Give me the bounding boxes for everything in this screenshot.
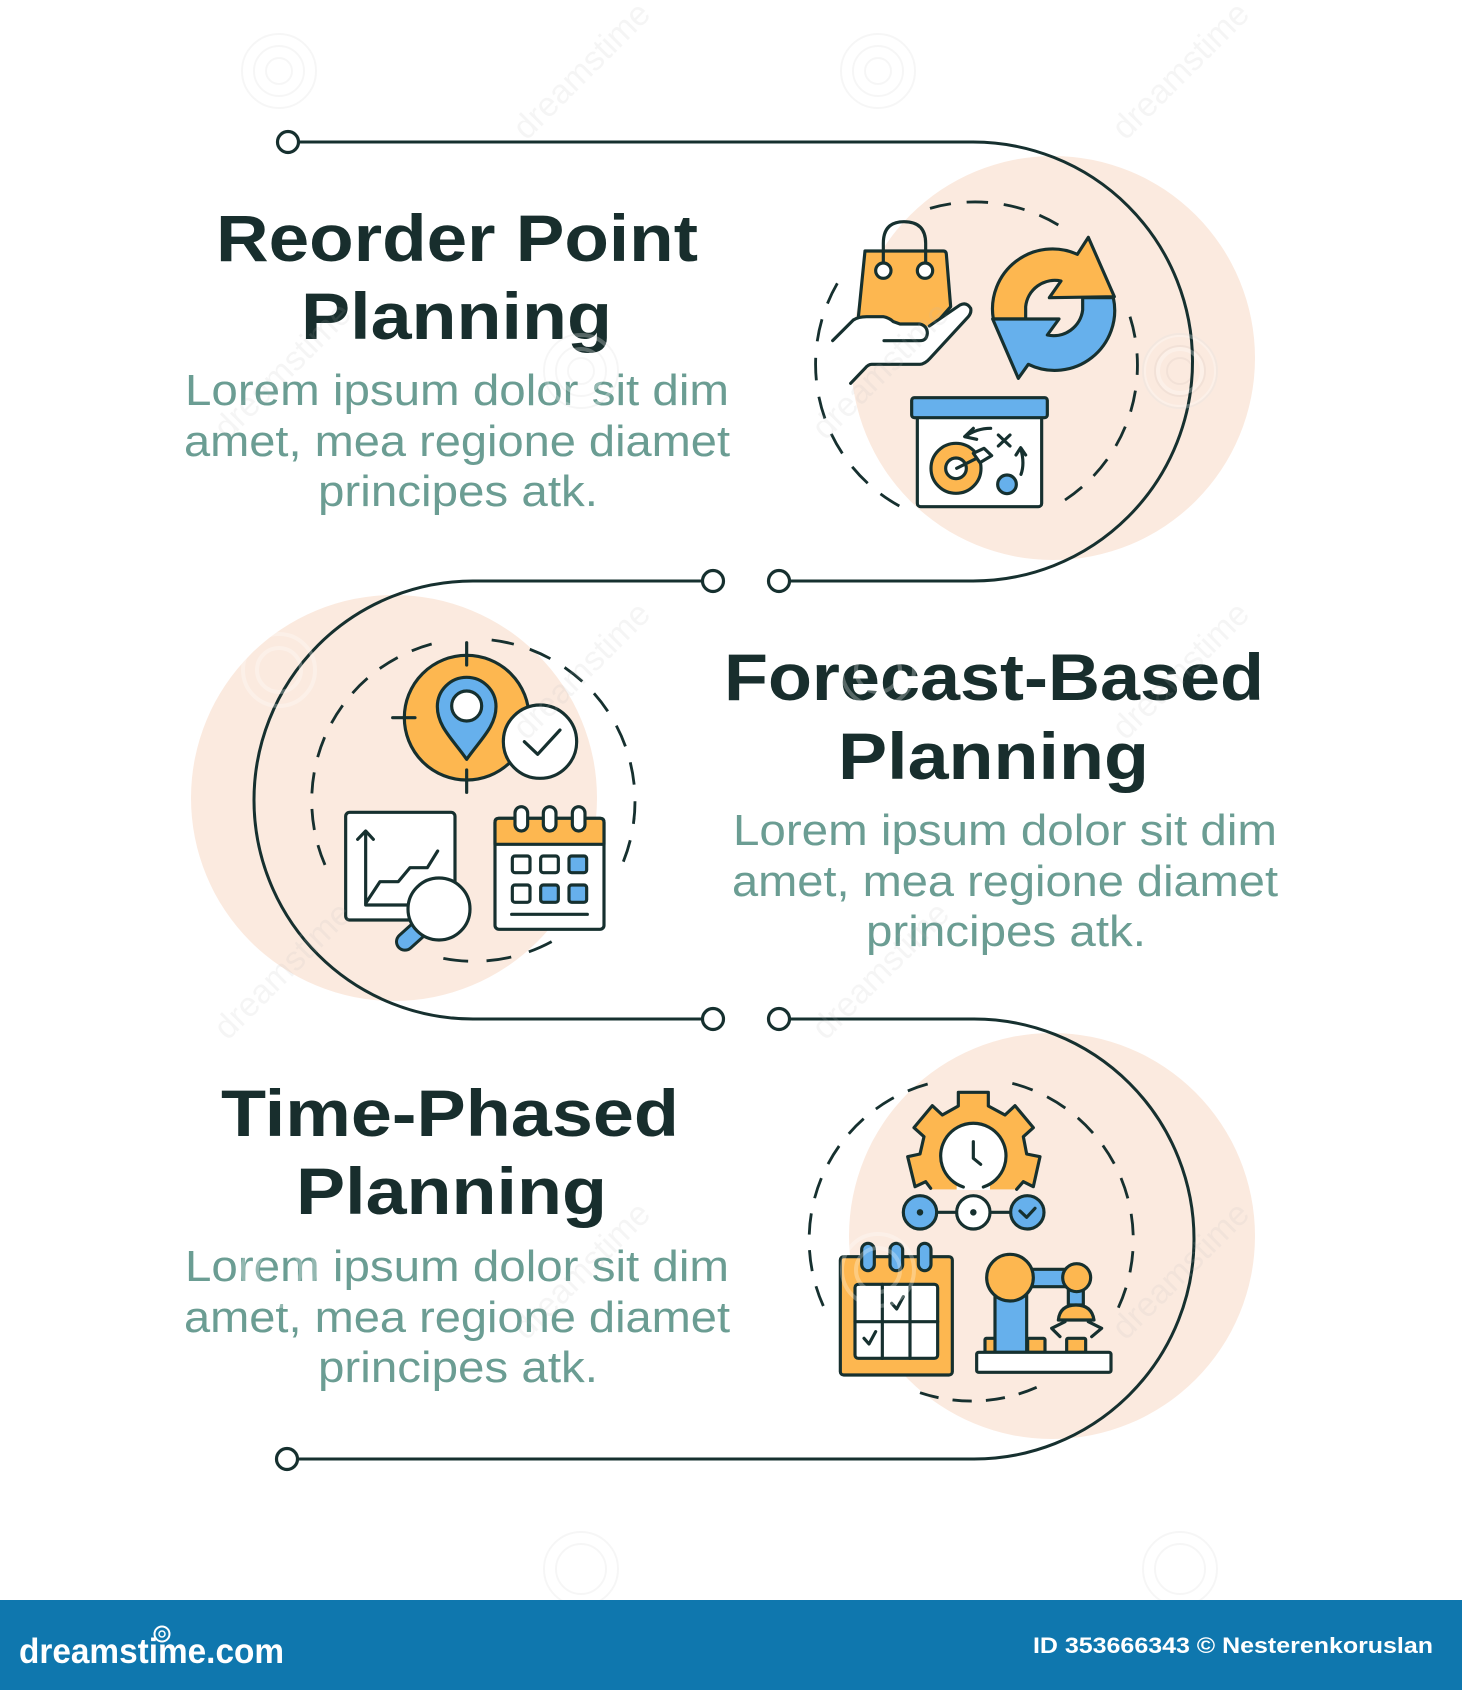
heading: time-phased planning <box>221 1076 679 1228</box>
text block: step 2 description: Lorem ipsum dolor sit dim <box>733 806 1277 855</box>
peach circle: step 3 <box>849 1033 1255 1439</box>
icon: timeline steps <box>903 1196 1044 1229</box>
icon: refresh arrows <box>992 237 1115 378</box>
text block: step 2 description: amet, mea regione diamet <box>732 857 1278 906</box>
icon: strategy board <box>912 398 1047 507</box>
icon: schedule calendar <box>840 1243 952 1375</box>
text block: step 3 description <box>184 1242 730 1392</box>
text block: step 3 description: amet, mea regione diamet <box>184 1293 730 1342</box>
heading: reorder point planning: Planning <box>301 279 612 353</box>
icon group: forecast-based planning <box>312 640 635 961</box>
text block: step 1 description <box>184 366 730 516</box>
connector line: step 1 <box>278 132 1193 592</box>
heading: reorder point planning: Reorder Point <box>216 201 698 275</box>
watermark overlay: dreamstime <box>1104 1194 1257 1347</box>
icon: shopping bag <box>858 222 951 330</box>
icon: gear with clock <box>908 1092 1040 1190</box>
watermark overlay: dreamstime <box>206 294 359 447</box>
watermark overlay: dreamstime <box>206 894 359 1047</box>
text block: step 2 description <box>732 806 1278 956</box>
icon: calendar <box>495 807 604 929</box>
peach circle: step 2 <box>191 595 597 1001</box>
text block: step 1 description: amet, mea regione diamet <box>184 417 730 466</box>
footer image id and credit: ID 353666343 © Nesterenkoruslan <box>1033 1633 1433 1658</box>
heading: time-phased planning: Planning <box>296 1154 607 1228</box>
text block: step 1 description: Lorem ipsum dolor sit dim <box>185 366 729 415</box>
watermark overlay: dreamstime <box>804 294 957 447</box>
icon: location target <box>393 643 577 792</box>
footer band <box>0 1600 1462 1690</box>
heading: forecast-based planning: Forecast-Based <box>724 640 1264 714</box>
icon: robot arm <box>977 1254 1111 1372</box>
watermark overlay: dreamstime <box>505 594 658 747</box>
text block: step 3 description: principes atk. <box>318 1343 598 1392</box>
watermark overlay <box>206 0 1257 1606</box>
icon: chart with magnifier <box>346 812 470 942</box>
heading: forecast-based planning <box>724 640 1264 793</box>
heading: reorder point planning <box>216 201 698 353</box>
connector line: step 2 <box>254 570 724 1030</box>
icon group: reorder point planning <box>816 202 1137 507</box>
text block: step 2 description: principes atk. <box>866 907 1146 956</box>
watermark overlay: dreamstime <box>1104 594 1257 747</box>
connector line: step 3 <box>276 1008 1194 1470</box>
heading: forecast-based planning: Planning <box>838 719 1149 793</box>
peach circle: step 1 <box>851 156 1255 560</box>
icon: hand <box>833 304 971 383</box>
watermark overlay: dreamstime <box>505 1194 658 1347</box>
text block: step 3 description: Lorem ipsum dolor sit dim <box>185 1242 729 1291</box>
heading: time-phased planning: Time-Phased <box>221 1076 679 1150</box>
text block: step 1 description: principes atk. <box>318 467 598 516</box>
icon group: time-phased planning <box>809 1083 1133 1401</box>
footer logo: dreamstime.com <box>19 1632 284 1671</box>
watermark overlay: dreamstime <box>804 894 957 1047</box>
